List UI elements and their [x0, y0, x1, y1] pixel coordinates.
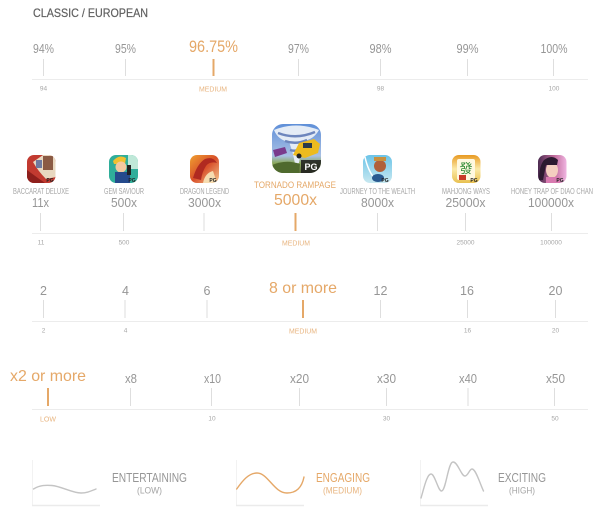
- tick: 97%: 97%: [288, 42, 309, 56]
- tick: 100%: 100: [549, 86, 560, 92]
- game: Mahjong Ways: 25000: [456, 240, 475, 246]
- game: Baccarat Deluxe: BACCARAT DELUXE: [13, 187, 69, 196]
- tick: 94%: [33, 42, 54, 92]
- tick: 95%: [115, 42, 136, 76]
- panel: entertaining low volatility: [32, 460, 187, 506]
- game: Dragon Legend: DRAGON LEGEND: [180, 187, 229, 196]
- game: Gem Saviour: 500: [119, 240, 130, 246]
- icon: Tornado Rampage: PG: [304, 162, 318, 172]
- tick: 20: [549, 284, 562, 334]
- game: Baccarat Deluxe: [13, 155, 69, 246]
- game: Tornado Rampage highlighted: 5000x: [274, 192, 317, 209]
- tick: x2 or more highlighted low: [10, 368, 86, 424]
- game: Honey Trap of Diao Chan: 100000: [540, 240, 562, 246]
- tick: 12: 12: [374, 284, 387, 298]
- game: Baccarat Deluxe: 11: [38, 240, 45, 246]
- tick: 96.75% highlighted medium: [189, 38, 238, 94]
- game: Journey to the Wealth: 8000x: [361, 196, 395, 210]
- tick: 16: 16: [460, 284, 474, 298]
- tick: 6: [204, 284, 211, 318]
- tick: 94%: 94%: [33, 42, 54, 56]
- chart: medium curve: [237, 473, 304, 493]
- game: Honey Trap of Diao Chan: 100000x: [528, 196, 575, 210]
- tick: 4: 4: [124, 328, 128, 334]
- tick: x8: x8: [125, 372, 137, 386]
- tick: 2: 2: [42, 328, 46, 334]
- game: Tornado Rampage highlighted: TORNADO RAMPAGE: [254, 180, 336, 191]
- tick: 98%: 98: [377, 86, 384, 92]
- game: Honey Trap of Diao Chan: [511, 155, 593, 246]
- icon: Dragon Legend: PG: [209, 178, 217, 184]
- tick: 4: [122, 284, 129, 334]
- tick: x40: x40: [459, 372, 477, 386]
- tick: 96.75% highlighted medium: 96.75%: [189, 38, 238, 56]
- tick: x10: [204, 372, 221, 422]
- tick: x50: [546, 372, 565, 422]
- game: Mahjong Ways: MAHJONG WAYS: [442, 187, 490, 196]
- game: Tornado Rampage highlighted: [254, 124, 336, 248]
- panel: exciting high volatility: (HIGH): [509, 486, 535, 496]
- tick: 8 or more highlighted medium: 8 or more: [269, 280, 337, 297]
- icon: Mahjong Ways: 發: [459, 158, 473, 177]
- tick: 16: 16: [464, 328, 471, 334]
- game: Dragon Legend: 3000x: [188, 196, 222, 210]
- chart: low curve: [34, 485, 96, 493]
- tick: 12: [374, 284, 387, 318]
- tick: 95%: 95%: [115, 42, 136, 56]
- game: Journey to the Wealth: [340, 155, 415, 231]
- panel: entertaining low volatility: ENTERTAINING: [112, 471, 187, 485]
- tick: x40: [459, 372, 477, 406]
- tick: 8 or more highlighted medium: MEDIUM: [289, 326, 317, 336]
- tick: x50: x50: [546, 372, 565, 386]
- tick: 98%: 98%: [370, 42, 392, 56]
- icon: Honey Trap of Diao Chan: PG: [556, 178, 564, 184]
- icon: Journey to the Wealth: PG: [381, 178, 389, 184]
- icon: Gem Saviour: PG: [128, 178, 136, 184]
- tick: x8: [125, 372, 137, 406]
- game: Gem Saviour: GEM SAVIOUR: [104, 187, 144, 196]
- chart: RTP scale: [32, 38, 588, 94]
- game: Journey to the Wealth: JOURNEY TO THE WEALTH: [340, 187, 415, 196]
- tick: 94%: 94: [40, 86, 47, 92]
- chart: multiplier scale: [10, 368, 588, 424]
- tick: 16: [460, 284, 474, 334]
- tick: 97%: [288, 42, 309, 76]
- game: Mahjong Ways: [442, 155, 490, 246]
- tick: x2 or more highlighted low: LOW: [40, 414, 57, 424]
- panel: engaging medium volatility: (MEDIUM): [323, 486, 362, 496]
- tick: x2 or more highlighted low: x2 or more: [10, 368, 86, 385]
- panel: engaging medium volatility: ENGAGING: [316, 471, 370, 485]
- icon: Mahjong Ways: [452, 155, 481, 184]
- tick: 6: 6: [204, 284, 211, 298]
- tick: x30: [377, 372, 396, 422]
- tick: 100%: [540, 42, 568, 92]
- game: Baccarat Deluxe: 11x: [32, 196, 50, 210]
- game: Gem Saviour: 500x: [111, 196, 138, 210]
- tick: 96.75% highlighted medium: MEDIUM: [199, 84, 227, 94]
- title: CLASSIC / EUROPEAN: [33, 6, 148, 20]
- tick: x10: 10: [208, 416, 216, 422]
- tick: x30: 30: [383, 416, 390, 422]
- tick: 8 or more highlighted medium: [269, 280, 337, 336]
- tick: x20: [290, 372, 309, 406]
- game: Dragon Legend: [180, 155, 229, 231]
- panel: entertaining low volatility: (LOW): [137, 486, 162, 496]
- tick: 20: 20: [552, 328, 559, 334]
- tick: x20: x20: [290, 372, 309, 386]
- panel: engaging medium volatility: [236, 460, 370, 506]
- icon: Baccarat Deluxe: PG: [46, 178, 54, 184]
- chart: min scatter scale: [32, 280, 588, 336]
- tick: x30: x30: [377, 372, 396, 386]
- panel: exciting high volatility: [420, 460, 546, 506]
- tick: 4: 4: [122, 284, 129, 298]
- game: Mahjong Ways: 25000x: [446, 196, 486, 210]
- tick: 2: [40, 284, 47, 334]
- tick: 98%: [370, 42, 392, 92]
- icon: Mahjong Ways: PG: [470, 178, 478, 184]
- tick: 100%: 100%: [540, 42, 568, 56]
- tick: 99%: 99%: [456, 42, 478, 56]
- game: Gem Saviour: [104, 155, 144, 246]
- panel: exciting high volatility: EXCITING: [498, 471, 546, 485]
- tick: 99%: [456, 42, 478, 76]
- tick: x50: 50: [551, 416, 559, 422]
- tick: 20: 20: [549, 284, 562, 298]
- chart: max win scale: [13, 124, 593, 248]
- chart: high curve: [421, 462, 484, 498]
- game: Tornado Rampage highlighted: MEDIUM: [282, 238, 310, 248]
- tick: 2: 2: [40, 284, 47, 298]
- tick: x10: x10: [204, 372, 221, 386]
